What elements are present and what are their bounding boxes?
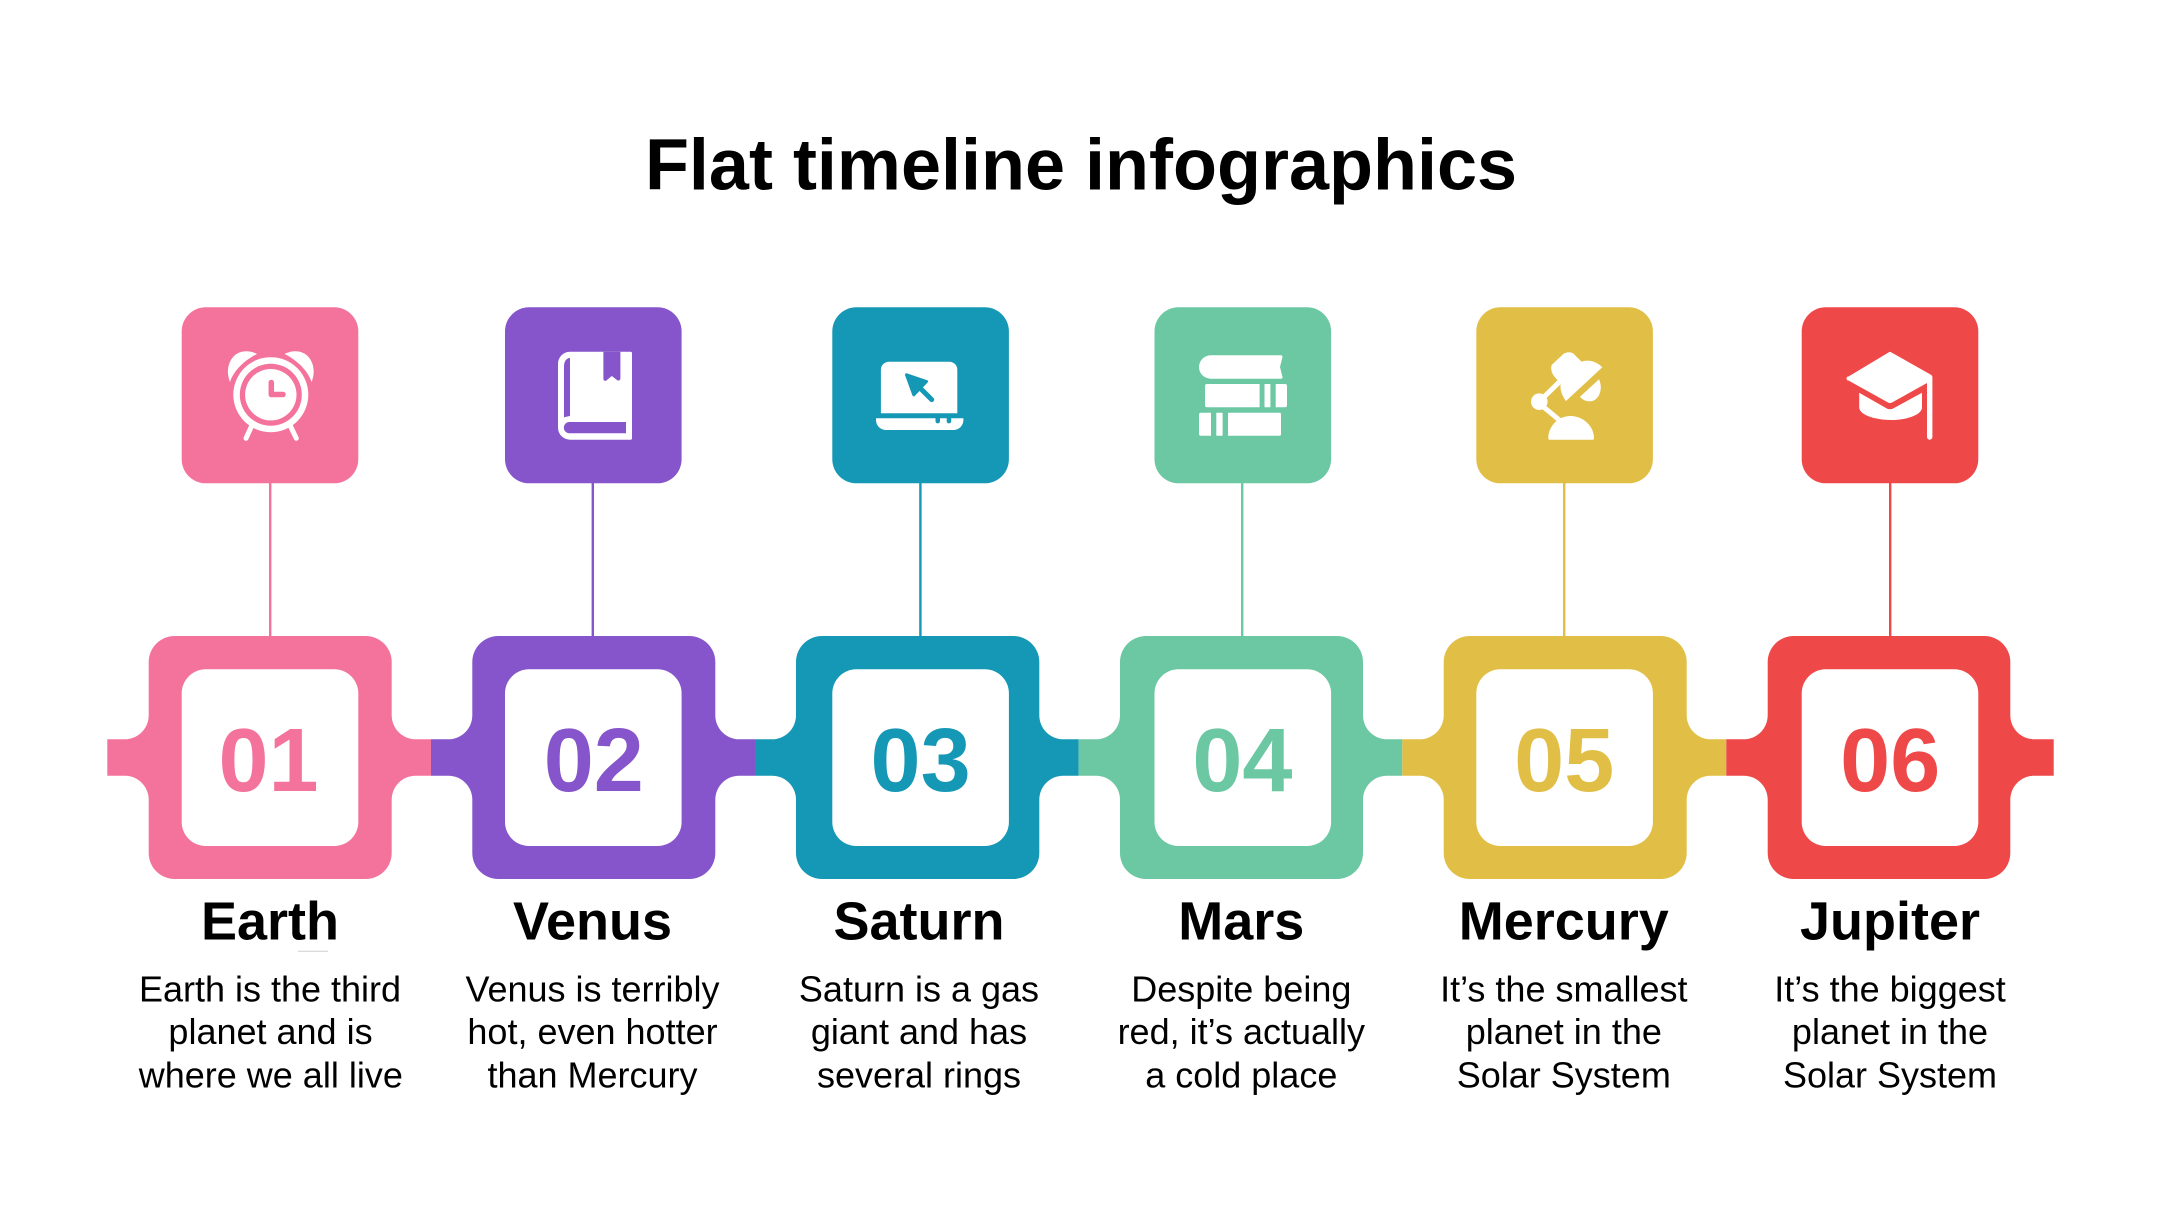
description: planet and is [168,1011,373,1052]
heading: Venus [513,892,672,952]
heading: Earth [201,892,339,952]
icon tile: stack of books [1154,307,1331,483]
number box: 06 [1840,711,1940,811]
title: Flat timeline infographics [645,126,1517,206]
puzzle frame [1402,636,1726,879]
description: It’s the biggest [1774,968,2006,1010]
icon tile: desk lamp [1476,307,1653,483]
number box: 03 [871,711,971,811]
number box [1802,669,1978,846]
number box [505,669,682,846]
puzzle frame [1079,636,1402,879]
connector line [269,483,271,637]
connector line [919,483,922,637]
connector line [592,483,594,637]
puzzle frame [431,636,755,879]
panel: step 03 Saturn [755,307,1079,1095]
number box: 04 [1192,711,1292,811]
puzzle frame [755,636,1079,879]
number box [1154,669,1331,846]
icon tile: alarm clock [182,307,358,483]
description: hot, even hotter [467,1011,718,1052]
description: It’s the smallest [1440,968,1688,1010]
icon tile: graduation cap [1802,307,1978,483]
heading: Jupiter [1800,892,1980,952]
panel: step 04 Mars [1079,307,1402,1095]
heading: Mercury [1459,892,1669,952]
heading: Mars [1178,892,1304,952]
panel: step 06 Jupiter [1726,307,2054,1095]
description: several rings [817,1054,1021,1095]
icon tile: book [505,307,682,483]
connector line [1241,483,1243,637]
number box [832,669,1009,846]
puzzle frame [1726,636,2054,879]
panel: step 01 Earth [107,307,431,1095]
panel: step 02 Venus [431,307,755,1095]
description: a cold place [1145,1054,1337,1095]
number box: 05 [1514,711,1614,811]
number box: 01 [218,711,319,811]
description: giant and has [811,1011,1027,1052]
description: where we all live [138,1054,403,1095]
connector line [1563,483,1565,637]
number box [182,669,358,846]
description: Venus is terribly [465,968,720,1010]
number box: 02 [544,711,644,811]
panel: step 05 Mercury [1402,307,1726,1095]
description: Saturn is a gas [799,968,1039,1010]
heading: Saturn [833,892,1005,952]
icon tile: laptop with cursor [832,307,1009,483]
puzzle frame [107,636,431,879]
description: planet in the [1792,1011,1988,1052]
description: Despite being [1131,968,1351,1010]
number box [1476,669,1653,846]
description: Solar System [1457,1054,1671,1095]
underline mark [298,950,328,952]
description: Earth is the third [139,968,401,1010]
connector line [1889,483,1891,637]
description: than Mercury [487,1054,698,1095]
description: planet in the [1466,1011,1662,1052]
description: Solar System [1783,1054,1997,1095]
description: red, it’s actually [1118,1011,1365,1052]
